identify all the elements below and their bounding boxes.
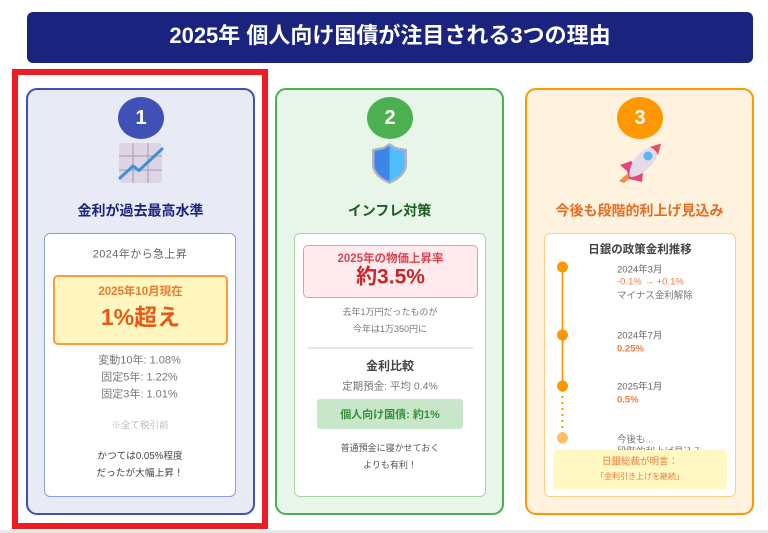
number badge 3 [617,97,663,139]
divider line [308,347,473,349]
panel: reason 1 [26,88,255,515]
inflation explanation: 今年は1万350円に [353,324,427,334]
panel 3 background [525,88,754,515]
icon: rising chart [118,143,164,183]
timeline line [557,262,568,444]
detail box 2 [294,233,486,497]
milestone January 2025 [617,381,662,405]
number badge 2: 2 [384,107,396,129]
comparison heading: 金利比較 [366,359,414,373]
callout value: 約3.5% [356,265,425,288]
label: 今後も... [617,434,653,445]
callout line 2: 「金利引き上げを継続」 [596,472,684,481]
comparison note: だったが大幅上昇！ [96,468,184,479]
highlight frame [12,69,268,529]
panel 2 background [275,88,504,515]
detail box 1 [44,233,236,497]
callout: inflation [303,245,478,298]
milestone July 2024 [617,330,662,354]
rate fixed 3y: 固定3年: 1.01% [101,388,178,400]
number badge 2 [367,97,413,139]
milestone March 2024 [617,264,693,301]
date: 2024年7月 [617,330,662,341]
callout label: 2025年の物価上昇率 [337,253,444,265]
conclusion: 普通預金に寝かせておく [341,443,439,453]
number badge 1: 1 [135,107,147,129]
tax note: ※全て税引前 [111,420,168,431]
callout line 1: 日銀総裁が明言： [602,456,678,467]
panel: reason 2 [275,88,504,515]
heading 2: インフレ対策 [348,203,431,219]
rate: 0.5% [617,394,639,405]
rate: -0.1% → +0.1% [617,276,684,287]
rates list [98,354,181,400]
bottom strip [0,530,768,533]
comparison note [96,450,184,479]
callout value: 1%超え [101,304,180,330]
panel: reason 3 [525,88,754,515]
conclusion [341,443,439,470]
detail box 3 [544,233,736,497]
icon: rocket [619,144,661,183]
milestone future [617,434,703,457]
projected text: 段階的利上げ見込み [617,446,703,457]
comparison note: かつては0.05%程度 [97,451,183,462]
heading 1: 金利が過去最高水準 [78,203,204,219]
number badge 3: 3 [634,107,646,129]
icon: shield [372,143,407,184]
heading 3: 今後も段階的利上げ見込み [556,203,724,219]
rate: 0.25% [617,343,644,354]
callout date: 2025年10月現在 [98,286,183,298]
date: 2025年1月 [617,381,662,392]
government bond rate: 個人向け国債: 約1% [340,409,440,421]
inflation explanation: 去年1万円だったものが [342,307,438,317]
time deposit rate: 定期預金: 平均 0.4% [342,381,438,393]
conclusion: よりも有利！ [363,460,417,470]
title banner [27,12,753,63]
callout: current rate [53,275,228,345]
note: マイナス金利解除 [617,290,693,301]
rate variable 10y: 変動10年: 1.08% [98,354,181,366]
callout: governor statement [553,450,727,489]
number badge 1 [118,97,164,139]
timeline title: 日銀の政策金利推移 [588,244,692,256]
panel 1 background [26,88,255,515]
date: 2024年3月 [617,264,662,275]
title banner: 2025年 個人向け国債が注目される3つの理由 [169,23,611,48]
inflation explanation [342,307,438,334]
subheading: 2024年から急上昇 [93,248,187,260]
government bond rate [317,399,463,429]
rate fixed 5y: 固定5年: 1.22% [101,371,178,383]
